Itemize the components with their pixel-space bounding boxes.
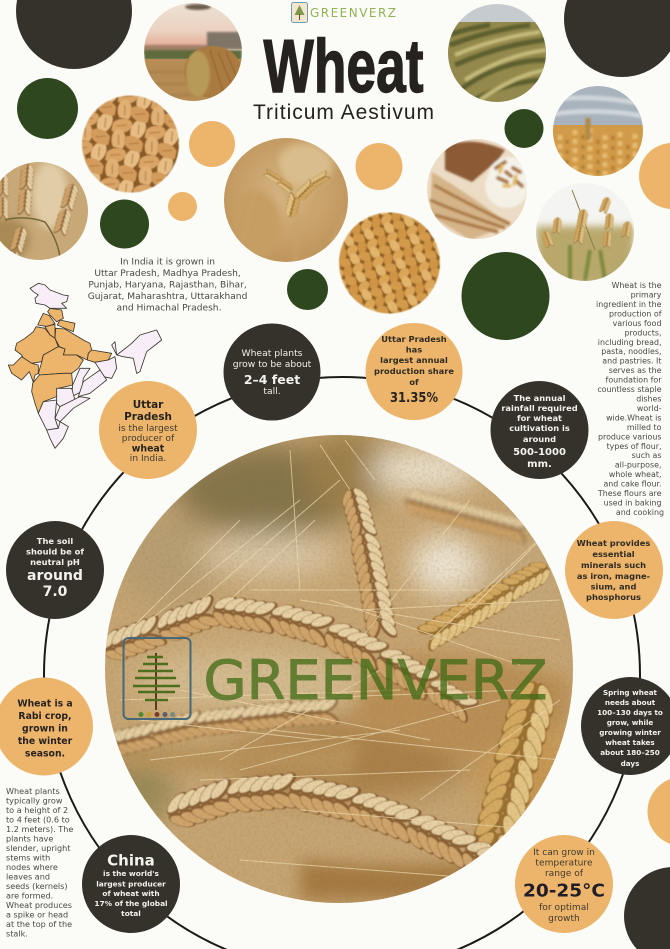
bubble: growing days: needs about bbox=[605, 698, 656, 707]
bubble: largest producer: in India. bbox=[130, 454, 166, 464]
text: uses of wheat: primary bbox=[631, 290, 662, 300]
bubble: largest producer bbox=[99, 381, 197, 479]
wheat ear: lower large bbox=[166, 772, 493, 869]
bubble: largest producer: Uttar bbox=[133, 399, 164, 411]
bubble: annual rainfall: for wheat bbox=[517, 413, 562, 423]
text: uses of wheat: such as bbox=[632, 451, 661, 460]
text: uses of wheat: countless staple bbox=[597, 385, 662, 394]
text: uses of wheat: production of bbox=[609, 309, 662, 318]
text: plant description: seeds (kernels) bbox=[6, 881, 68, 891]
text: uses of wheat: products, bbox=[625, 328, 661, 337]
photo: hay bale in field bbox=[144, 3, 245, 102]
bubble: growing days: growing winter bbox=[599, 728, 661, 737]
awns bbox=[120, 440, 560, 880]
bubble: minerals: as iron, magne- bbox=[577, 571, 650, 581]
text: plant description: a spike or head bbox=[6, 910, 68, 920]
bubble: annual rainfall: around bbox=[523, 434, 556, 444]
text: plant description: 1.2 meters). The bbox=[6, 824, 73, 834]
green circle: large bbox=[462, 252, 550, 340]
green circle: below grains bbox=[100, 200, 149, 248]
bubble: temperature range: range of bbox=[545, 869, 584, 879]
bubble: annual rainfall: 500-1000 bbox=[513, 447, 566, 458]
dark circle: top right bbox=[564, 0, 670, 77]
bubble: minerals: sium, and bbox=[591, 582, 636, 592]
bubble: Uttar Pradesh production share: has bbox=[406, 344, 422, 354]
text: uses of wheat: foundation for bbox=[606, 376, 662, 385]
bubble: Rabi crop bbox=[0, 678, 93, 776]
bubble: largest producer: wheat bbox=[132, 444, 165, 454]
text: plant description: to a height of 2 bbox=[6, 805, 68, 815]
bubble: Uttar Pradesh production share: Uttar Pradesh bbox=[381, 334, 447, 344]
bubble: Uttar Pradesh production share: 31.35% bbox=[390, 391, 438, 406]
tan circle: small bbox=[168, 192, 197, 221]
wheat ear: background golden tones bbox=[110, 653, 570, 900]
photo: wheat kernels small bbox=[339, 212, 440, 314]
text: uses of wheat: serves as the bbox=[609, 366, 662, 375]
text: plant description: stalk. bbox=[6, 928, 28, 938]
bubble: Uttar Pradesh production share: production share bbox=[374, 366, 454, 376]
bubble: China: total bbox=[121, 909, 141, 918]
bubble: plant height: tall. bbox=[263, 386, 281, 397]
bubble: largest producer: Pradesh bbox=[124, 411, 172, 423]
text: uses of wheat: produce various bbox=[598, 432, 661, 441]
bubble: largest producer: producer of bbox=[122, 434, 175, 444]
photo: centre wheat ear bbox=[224, 138, 348, 262]
text: uses of wheat: including bread, bbox=[598, 338, 661, 347]
photo: cereal bowl and wheat bbox=[427, 139, 529, 240]
bubble: soil pH bbox=[6, 521, 104, 619]
subtitle: Triticum Aestivum bbox=[253, 101, 434, 124]
text: where wheat is grown in India: Punjab, Haryana, Rajasthan, Bihar, bbox=[88, 280, 247, 290]
text: plant description: plants have bbox=[6, 834, 53, 844]
bubble: Uttar Pradesh production share bbox=[366, 323, 462, 420]
wheat ear: upper right blurred bbox=[404, 490, 528, 544]
bubble: Rabi crop: Wheat is a bbox=[17, 698, 73, 710]
text: plant description: to 4 feet (0.6 to bbox=[6, 814, 70, 824]
wheat ear: mid left bbox=[114, 698, 340, 756]
text: uses of wheat: wide.Wheat is bbox=[606, 413, 661, 422]
text: uses of wheat: dishes bbox=[636, 394, 661, 404]
text: plant description: Wheat plants bbox=[6, 786, 60, 796]
bubble: growing days: grow, while bbox=[607, 718, 653, 727]
text: uses of wheat: and cooking bbox=[616, 508, 664, 517]
tan circle: centre bbox=[356, 143, 402, 190]
logo: Greenverz header: GREENVERZ bbox=[310, 6, 396, 20]
ring connecting the facts bbox=[44, 377, 640, 949]
bubble: temperature range bbox=[515, 835, 613, 933]
bubble: plant height: 2–4 feet bbox=[244, 372, 300, 387]
bubble: temperature range: 20-25°C bbox=[523, 880, 605, 902]
photo: wheat kernels large bbox=[82, 96, 179, 192]
green circle: under centre photo bbox=[287, 269, 328, 310]
photo: wheat ears left bbox=[0, 162, 88, 260]
bubble: China: is the world's bbox=[103, 869, 160, 878]
text: plant description: stems with bbox=[6, 852, 50, 862]
text: uses of wheat: and cake flour. bbox=[603, 480, 661, 489]
text: where wheat is grown in India: Gujarat, Maharashtra, Uttarakhand bbox=[88, 292, 247, 302]
wheat ear: large central bbox=[106, 594, 480, 724]
bubble: annual rainfall bbox=[490, 381, 588, 479]
bubble: temperature range: for optimal bbox=[539, 903, 589, 913]
photo: wheat ears against pale sky bbox=[536, 190, 634, 281]
bubble: Rabi crop: the winter bbox=[18, 736, 73, 747]
text: uses of wheat: milled to bbox=[627, 423, 662, 432]
text: where wheat is grown in India: Uttar Pradesh, Madhya Pradesh, bbox=[94, 269, 241, 279]
bubble: plant height: grow to be about bbox=[233, 359, 312, 370]
bubble: China: 17% of the global bbox=[94, 899, 168, 908]
dark circle: bottom right bbox=[624, 867, 670, 949]
text: plant description: are formed. bbox=[6, 890, 53, 900]
map: India wheat-growing states bbox=[8, 283, 162, 448]
photo: wheat field under cloudy sky bbox=[553, 86, 643, 177]
photo: top right wheat field bbox=[448, 4, 546, 102]
bubble: Rabi crop: season. bbox=[25, 748, 65, 760]
text: uses of wheat: various food bbox=[613, 319, 661, 328]
wheat ear: upper vertical bbox=[342, 488, 398, 638]
bubble: growing days: 100–130 days to bbox=[597, 708, 663, 717]
bubble: soil pH: around bbox=[27, 568, 83, 584]
bubble: Uttar Pradesh production share: largest annual bbox=[380, 355, 448, 365]
text: plant description: leaves and bbox=[6, 872, 50, 882]
text: uses of wheat: all-purpose, bbox=[615, 461, 661, 470]
tan circle: by grains bbox=[189, 121, 235, 167]
noise texture bbox=[105, 435, 573, 903]
text: plant description: Wheat produces bbox=[6, 900, 72, 910]
bubble: annual rainfall: rainfall required bbox=[501, 403, 578, 413]
main photo: wheat ears with watermark bbox=[105, 435, 573, 903]
text: uses of wheat: Wheat is the bbox=[612, 281, 662, 290]
bubble: minerals: Wheat provides bbox=[577, 538, 650, 548]
bubble: annual rainfall: cultivation is bbox=[509, 423, 570, 433]
bubble: growing days: days bbox=[621, 759, 639, 768]
logo: Greenverz header bbox=[292, 2, 396, 22]
text: plant description: slender, upright bbox=[6, 843, 70, 853]
text: uses of wheat: types of flour, bbox=[607, 442, 661, 451]
watermark logo bbox=[124, 638, 548, 719]
bubble: soil pH: The soil bbox=[37, 536, 73, 546]
text: uses of wheat: and pastries. It bbox=[602, 357, 661, 366]
bubble: temperature range: growth bbox=[548, 914, 580, 924]
bubble: growing days: Spring wheat bbox=[603, 688, 658, 697]
bubble: temperature range: temperature bbox=[535, 858, 593, 868]
bubble: largest producer: is the largest bbox=[118, 424, 178, 434]
title: Wheat bbox=[264, 24, 424, 108]
dark circle: top left bbox=[16, 0, 132, 69]
wheat ear: right side bbox=[416, 562, 550, 652]
bubble: Rabi crop: grown in bbox=[22, 724, 68, 734]
bubble: soil pH: should be of bbox=[26, 546, 84, 556]
tan circle: lower right edge bbox=[648, 777, 670, 846]
text: uses of wheat: whole wheat, bbox=[609, 470, 661, 479]
bubble: China: of wheat with bbox=[102, 889, 160, 898]
bubble: annual rainfall: The annual bbox=[514, 393, 566, 403]
text: plant description: at the top of the bbox=[6, 919, 72, 929]
bubble: plant height: Wheat plants bbox=[242, 348, 303, 359]
text: where wheat is grown in India: and Himachal Pradesh. bbox=[117, 304, 221, 314]
watermark logo: GREENVERZ bbox=[204, 649, 548, 712]
bubble: plant height bbox=[224, 324, 320, 420]
bubble: minerals bbox=[565, 521, 663, 619]
bubble: minerals: minerals such bbox=[581, 560, 646, 570]
green circle: right of top wheat bbox=[504, 109, 544, 148]
bubble: growing days: wheat takes bbox=[605, 738, 655, 747]
bubble: temperature range: It can grow in bbox=[533, 848, 595, 858]
bubble: soil pH: neutral pH bbox=[30, 557, 80, 567]
text: uses of wheat: world- bbox=[637, 404, 662, 413]
text: uses of wheat: ingredient in the bbox=[596, 300, 662, 309]
bubble: Uttar Pradesh production share: of bbox=[409, 377, 419, 387]
bubble: growing days: about 180–250 bbox=[600, 748, 660, 757]
bubble: growing days bbox=[581, 677, 670, 775]
wheat ear: lower right vertical bbox=[466, 680, 554, 866]
bubble: China: China bbox=[107, 852, 155, 870]
bubble: minerals: essential bbox=[592, 549, 635, 559]
text: where wheat is grown in India: In India it is grown in bbox=[120, 258, 215, 268]
text: uses of wheat: These flours are bbox=[597, 489, 662, 498]
text: plant description: nodes where bbox=[6, 862, 58, 872]
bubble: annual rainfall: mm. bbox=[527, 459, 552, 470]
bubble: soil pH: 7.0 bbox=[43, 584, 68, 600]
text: uses of wheat: used in baking bbox=[604, 498, 661, 508]
bubble: China: largest producer bbox=[96, 880, 166, 888]
text: uses of wheat: pasta, noodles, bbox=[601, 347, 661, 356]
green circle: left bbox=[17, 78, 78, 139]
bubble: China bbox=[82, 835, 180, 933]
bubble: minerals: phosphorus bbox=[586, 592, 641, 602]
tan circle: right edge bbox=[639, 143, 670, 209]
bubble: Rabi crop: Rabi crop, bbox=[18, 711, 72, 722]
text: plant description: typically grow bbox=[6, 796, 63, 806]
